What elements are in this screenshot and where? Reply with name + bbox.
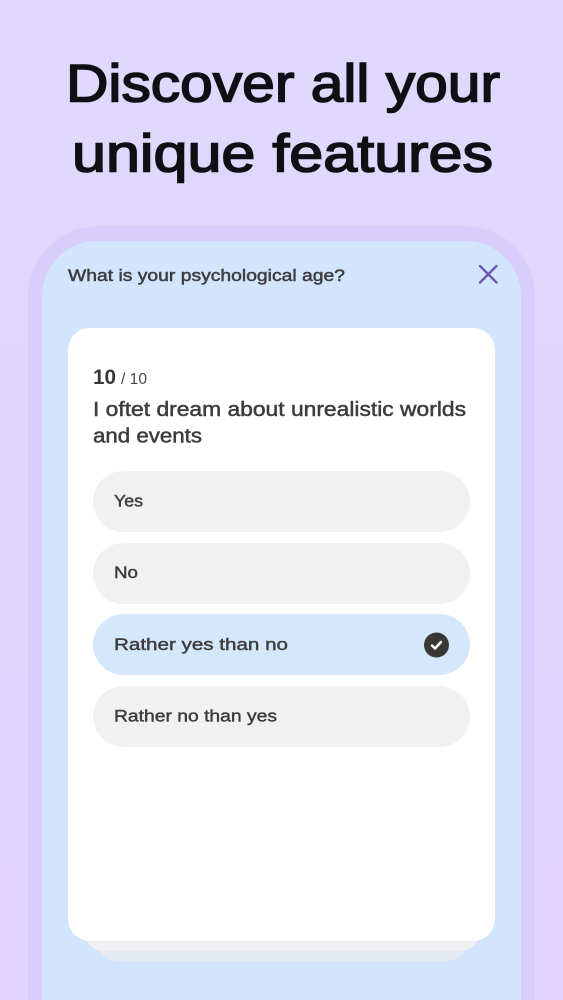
question counter: 10 — [93, 366, 116, 389]
title — [66, 54, 500, 184]
question counter — [93, 366, 147, 389]
phone frame — [28, 226, 535, 1000]
stacked cards behind — [84, 900, 480, 961]
option: yes — [93, 471, 470, 532]
title: unique features — [72, 124, 493, 184]
icon: close — [480, 266, 496, 282]
icon: check — [424, 632, 449, 658]
option: rather yes than no, selected — [93, 614, 470, 675]
question counter: / 10 — [121, 371, 147, 388]
quiz title: What is your psychological age? — [68, 266, 345, 285]
question card — [68, 328, 495, 941]
question text — [93, 399, 466, 448]
option: rather yes than no, selected: Rather yes than no — [114, 635, 288, 654]
title: Discover all your — [66, 54, 500, 114]
option: yes: Yes — [114, 492, 143, 510]
question text: and events — [93, 426, 202, 448]
option: no — [93, 543, 470, 604]
option: no: No — [114, 563, 138, 582]
option: rather no than yes — [93, 686, 470, 747]
option: rather no than yes: Rather no than yes — [114, 706, 277, 726]
question text: I oftet dream about unrealistic worlds — [93, 399, 466, 421]
phone screen — [42, 241, 521, 1000]
